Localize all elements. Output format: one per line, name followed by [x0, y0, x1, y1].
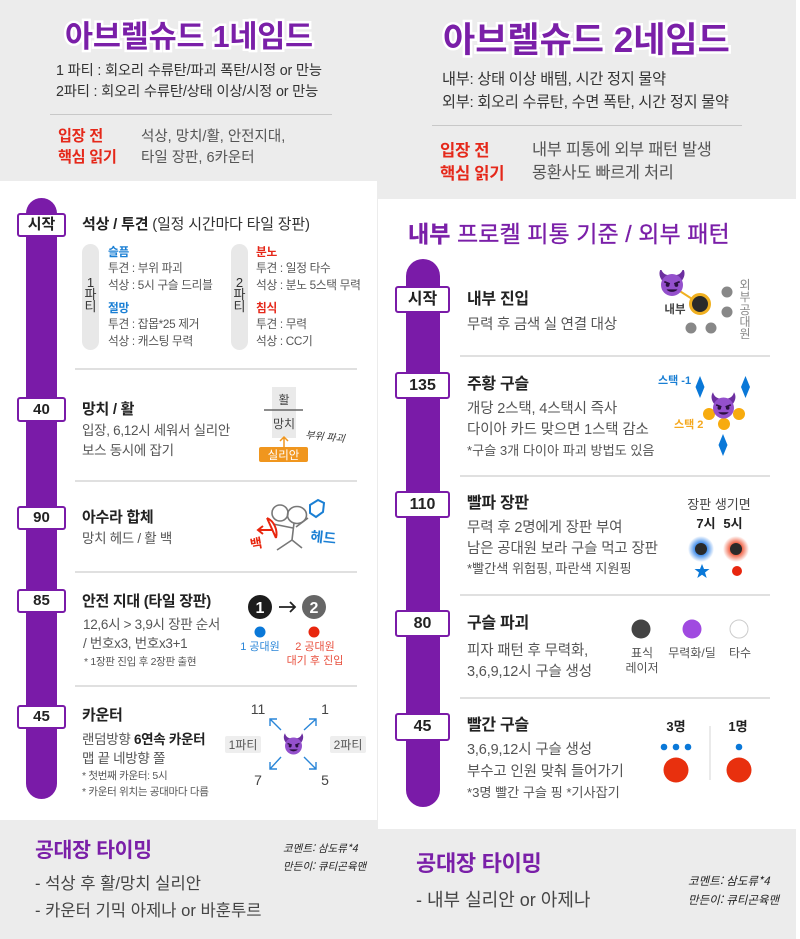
- diagram: counter directions: 1: [321, 701, 329, 717]
- pre-entry key points: [532, 141, 712, 182]
- pre-entry label: [440, 141, 504, 183]
- party 2 erosion: 투견 : 무력: [256, 318, 307, 331]
- badge: 80: 80: [414, 615, 431, 632]
- diagram: field positions: 5시: [723, 516, 743, 531]
- credits: [283, 841, 368, 874]
- white timeline sheet: [0, 181, 377, 820]
- diagram: counter directions: [225, 701, 366, 788]
- badge: 85: [17, 589, 66, 613]
- body: hammer and bow: 입장, 6,12시 세워서 실리안: [82, 423, 230, 438]
- diagram: stacks: [658, 374, 750, 456]
- credits: 만든이: 큐티곤육맨: [283, 859, 366, 874]
- heading: orb break: 구슬 파괴: [467, 615, 529, 632]
- badge: 90: [17, 506, 66, 530]
- credits: [688, 873, 780, 908]
- party engravings text: [56, 63, 322, 100]
- body: safe zone: [83, 617, 220, 651]
- heading: orange orb: 주황 구슬: [467, 376, 529, 393]
- pill: party 1: 티: [85, 299, 96, 314]
- party 2 rage: 투견 : 일정 타수: [256, 262, 331, 275]
- pre-entry label: 입장 전: [58, 128, 103, 145]
- body: hammer and bow: 보스 동시에 잡기: [82, 442, 174, 458]
- badge: 135: 135: [409, 377, 436, 394]
- body: hammer and bow: [82, 423, 230, 458]
- panel: second gate guide: [378, 0, 796, 939]
- pre-entry label: 핵심 읽기: [440, 164, 504, 183]
- party 2 rage: [256, 246, 361, 292]
- heading: counter: 카운터: [82, 707, 123, 724]
- diagram: inner target: 공: [739, 303, 751, 317]
- timing list: - 석상 후 활/망치 실리안: [35, 874, 201, 893]
- pre-entry key points: 석상, 망치/활, 안전지대,: [141, 129, 285, 145]
- credits: 코멘트: 삼도류*4: [283, 841, 358, 856]
- body: orb break: 3,6,9,12시 구슬 생성: [467, 664, 592, 680]
- party engravings text: 2파티 : 회오리 수류탄/상태 이상/시정 or 만능: [56, 84, 318, 100]
- legend: orb roles: 무력화/딜: [668, 646, 716, 660]
- heading: raid leader timing: 공대장 타이밍: [416, 851, 541, 876]
- party 1 sorrow: [108, 246, 213, 292]
- diagram: hammer bow stagger: 실리안: [268, 449, 300, 462]
- party 1 sorrow: 슬픔: [108, 246, 129, 259]
- diagram: counter directions: 1파티: [229, 738, 257, 752]
- diagram: counter directions: 11: [251, 701, 265, 717]
- panel: raid leader timing 1: [0, 820, 378, 939]
- body: safe zone: 12,6시 > 3,9시 장판 순서: [83, 617, 220, 632]
- diagram: counter directions: 2파티: [334, 738, 362, 752]
- body: red orb: [467, 742, 624, 780]
- badge: 45: 45: [414, 718, 431, 735]
- notes: counter: * 카운터 위치는 공대마다 다름: [82, 786, 209, 798]
- diagram: counter directions: 5: [321, 772, 329, 788]
- badge: start: 시작: [408, 291, 437, 308]
- pre-entry key points: 몽환사도 빠르게 처리: [532, 164, 674, 182]
- body: counter: 랜덤방향 6연속 카운터: [82, 732, 205, 747]
- badge: 40: 40: [33, 401, 50, 418]
- diagram: field positions: 장판 생기면: [687, 497, 751, 512]
- timing list: - 카운터 기믹 아제나 or 바훈투르: [35, 901, 262, 920]
- pill: party 2: 2: [236, 275, 243, 290]
- heading: hammer and bow: 망치 / 활: [82, 401, 134, 418]
- body: red orb: 3,6,9,12시 구슬 생성: [467, 742, 592, 758]
- diagram: safe zone order: [240, 595, 343, 667]
- party 2 erosion: 석상 : CC기: [256, 335, 312, 348]
- body: orange orb: 다이아 카드 맞으면 1스택 감소: [467, 422, 649, 438]
- legend: orb roles: 타수: [729, 646, 751, 660]
- party 1 despair: 절망: [108, 302, 129, 315]
- party 2 rage: 석상 : 분노 5스택 무력: [256, 279, 361, 292]
- diagram: inner target: [659, 270, 751, 341]
- badge: 45: [17, 705, 66, 729]
- diagram: inner target: 원: [739, 327, 751, 341]
- heading: enter inner: 내부 진입: [467, 291, 529, 308]
- body: red blue field: 남은 공대원 보라 구슬 먹고 장판: [467, 541, 658, 557]
- pre-entry key points: [141, 128, 285, 166]
- heading: red blue field: 빨파 장판: [467, 495, 529, 512]
- illustration: asura stick figure: [249, 498, 337, 552]
- pill: party 1: [82, 244, 99, 350]
- party 1 despair: 투견 : 잡몹*25 제거: [108, 318, 199, 331]
- inner and outer engravings: 외부: 회오리 수류탄, 수면 폭탄, 시간 정지 물약: [442, 94, 729, 111]
- timing list: - 내부 실리안 or 아제나: [416, 890, 590, 910]
- pill: party 2: [231, 244, 248, 350]
- section heading: phase criteria: 내부 프로켈 피통 기준 / 외부 패턴: [408, 221, 730, 247]
- illustration: asura stick figure: 헤드: [310, 528, 337, 547]
- diagram: safe zone order: 2: [310, 600, 319, 617]
- legend: orb roles: [625, 620, 751, 675]
- badge: 45: [395, 713, 450, 741]
- body: enter inner: 무력 후 금색 실 연결 대상: [467, 317, 617, 333]
- badge: 40: [17, 397, 66, 422]
- pre-entry label: 핵심 읽기: [58, 148, 117, 166]
- badge: 90: 90: [33, 509, 50, 526]
- pre-entry key points: 내부 피통에 외부 패턴 발생: [532, 141, 712, 159]
- body: red blue field: [467, 520, 658, 557]
- note: safe zone: * 1장판 진입 후 2장판 출현: [84, 656, 196, 668]
- body: asura merge: 망치 헤드 / 활 백: [82, 531, 172, 546]
- body: orb break: 피자 패턴 후 무력화,: [467, 643, 588, 659]
- party 1 despair: [108, 302, 199, 348]
- title: gate 1: 아브렐슈드 1네임드: [65, 20, 313, 54]
- heading: red orb: 빨간 구슬: [467, 717, 529, 734]
- diagram: red orb headcount: [660, 719, 752, 782]
- body: red blue field: 무력 후 2명에게 장판 부여: [467, 520, 622, 536]
- party 2 erosion: [256, 302, 312, 348]
- diagram: hammer bow stagger: 활: [278, 393, 290, 407]
- credits: 코멘트: 삼도류*4: [688, 873, 770, 889]
- pre-entry label: 입장 전: [440, 141, 489, 160]
- pill: party 2: 파: [234, 287, 245, 302]
- heading: asura merge: 아수라 합체: [82, 509, 153, 526]
- diagram: safe zone order: 1: [256, 600, 265, 617]
- inner and outer engravings: 내부: 상태 이상 배템, 시간 정지 물약: [442, 71, 666, 88]
- diagram: inner target: 대: [739, 315, 751, 329]
- diagram: inner target: 내부: [664, 302, 686, 316]
- timeline bar: [406, 259, 440, 807]
- body: counter: [82, 732, 205, 766]
- body: orange orb: 개당 2스택, 4스택시 즉사: [467, 401, 617, 417]
- diagram: inner target: 부: [739, 290, 751, 304]
- diagram: safe zone order: 대기 후 진입: [287, 654, 343, 667]
- note: red blue field: *빨간색 위험핑, 파란색 지원핑: [467, 561, 632, 576]
- body: counter: 맵 끝 네방향 쫄: [82, 751, 165, 766]
- diagram: hammer bow stagger: 부위 파괴: [305, 429, 346, 445]
- party 1 sorrow: 투견 : 부위 파괴: [108, 262, 183, 275]
- pre-entry key points: 타일 장판, 6카운터: [141, 150, 255, 166]
- diagram: safe zone order: 2 공대원: [295, 640, 335, 653]
- diagram: hammer bow stagger: 망치: [273, 417, 295, 431]
- inner and outer engravings: [442, 71, 729, 111]
- badge: 45: 45: [33, 708, 50, 725]
- diagram: inner target: 외: [739, 278, 751, 292]
- diagram: stacks: 스택 2: [674, 418, 703, 431]
- diagram: field positions: 7시: [696, 516, 716, 531]
- pill: party 1: 파: [85, 287, 96, 302]
- note: red orb: *3명 빨간 구슬 핑 *기사잡기: [467, 785, 620, 800]
- badge: 135: [395, 372, 450, 399]
- pill: party 1: 1: [87, 275, 94, 290]
- title: gate 2: 아브렐슈드 2네임드: [443, 21, 730, 60]
- heading: safe zone: 안전 지대 (타일 장판): [82, 593, 211, 610]
- body: safe zone: / 번호x3, 번호x3+1: [83, 636, 187, 651]
- badge: start: [17, 213, 66, 237]
- diagram: stacks: 스택 -1: [658, 374, 691, 387]
- heading: statue and fighter: 석상 / 투견 (일정 시간마다 타일 장판): [82, 216, 310, 233]
- body: red orb: 부수고 인원 맞춰 들어가기: [467, 764, 624, 780]
- party engravings text: 1 파티 : 회오리 수류탄/파괴 폭탄/시정 or 만능: [56, 63, 322, 79]
- party 2 erosion: 침식: [256, 302, 277, 315]
- heading: raid leader timing: 공대장 타이밍: [35, 839, 152, 862]
- badge: 85: 85: [33, 592, 50, 609]
- badge: start: 시작: [28, 216, 55, 233]
- badge: 110: 110: [410, 496, 435, 513]
- diagram: red orb headcount: 3명: [666, 719, 686, 734]
- notes: counter: [82, 770, 209, 798]
- timeline bar: [26, 198, 57, 799]
- credits: 만든이: 큐티곤육맨: [688, 892, 779, 908]
- body: orb break: [467, 642, 592, 680]
- notes: counter: * 첫번째 카운터: 5시: [82, 770, 167, 782]
- badge: 80: [395, 610, 450, 637]
- legend: orb roles: 레이저: [625, 661, 659, 675]
- party 1 sorrow: 석상 : 5시 구슬 드리블: [108, 279, 213, 292]
- party 1 despair: 석상 : 캐스팅 무력: [108, 335, 193, 348]
- panel: first gate guide: [0, 0, 378, 939]
- timing list: [35, 874, 262, 920]
- pre-entry label: [58, 128, 117, 166]
- diagram: field positions: [687, 497, 751, 578]
- diagram: safe zone order: 1 공대원: [240, 640, 280, 653]
- diagram: hammer bow stagger: [259, 387, 346, 462]
- badge: start: [395, 286, 450, 313]
- party 2 rage: 분노: [256, 246, 277, 259]
- diagram: counter directions: 7: [254, 772, 262, 788]
- illustration: asura stick figure: 백: [249, 535, 263, 552]
- diagram: red orb headcount: 1명: [728, 719, 748, 734]
- legend: orb roles: 표식: [631, 646, 653, 660]
- body: orange orb: [467, 400, 649, 438]
- note: orange orb: *구슬 3개 다이아 파괴 방법도 있음: [467, 443, 655, 458]
- white timeline sheet: [378, 199, 796, 829]
- badge: 110: [395, 491, 450, 518]
- pill: party 2: 티: [234, 299, 245, 314]
